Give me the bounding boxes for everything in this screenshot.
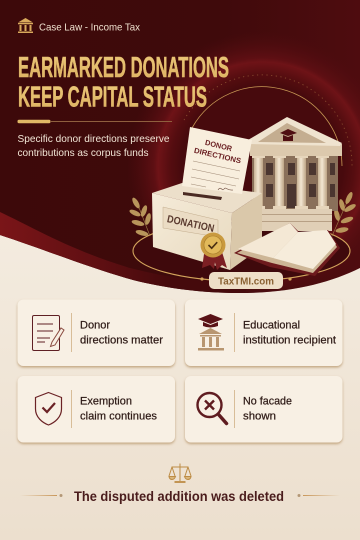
card: no facade shown [185, 376, 342, 442]
paper: donor directions: DIRECTIONS [193, 146, 242, 165]
title [18, 52, 229, 114]
decorative ring [184, 75, 352, 166]
title: KEEP CAPITAL STATUS [18, 82, 207, 114]
header: category [18, 18, 140, 34]
text: No facade [243, 396, 292, 408]
text: Exemption [80, 396, 132, 408]
hero panel [0, 0, 360, 301]
building [248, 117, 342, 231]
paper: donor directions [182, 127, 252, 194]
seal [200, 232, 227, 270]
text [80, 396, 158, 422]
text: shown [243, 410, 276, 422]
text [243, 320, 336, 346]
card: educational institution recipient [185, 300, 342, 366]
open book [234, 223, 340, 276]
paper: donor directions: DONOR [204, 138, 234, 153]
illustration [129, 117, 357, 289]
ballot box: DONATION [166, 213, 215, 235]
card: donor directions matter [18, 300, 175, 366]
icon: shield with check [36, 392, 62, 425]
laurel right [332, 191, 357, 236]
icon: document with pencil [32, 316, 64, 350]
subtitle: contributions as corpus funds [18, 148, 148, 159]
footer conclusion: The disputed addition was deleted [74, 488, 284, 504]
plinth ellipse [133, 221, 350, 281]
text [80, 320, 163, 346]
card: exemption claim continues [18, 376, 175, 442]
text: Donor [80, 320, 110, 332]
text: Educational [243, 320, 300, 332]
text: institution recipient [243, 334, 336, 346]
icon: cap and building [198, 314, 224, 350]
title rule [18, 120, 172, 123]
text [243, 396, 292, 422]
text: claim continues [80, 410, 158, 422]
category label: Case Law - Income Tax [39, 22, 140, 34]
icon: magnifier with cross [198, 393, 226, 424]
text: directions matter [80, 334, 163, 346]
ballot box [152, 127, 262, 270]
badge: TaxTMI.com: TaxTMI.com [218, 276, 274, 288]
badge: TaxTMI.com [200, 272, 292, 289]
icon: scales of justice [169, 464, 191, 482]
laurel left [129, 197, 152, 237]
subtitle: Specific donor directions preserve [18, 134, 170, 145]
subtitle [18, 134, 170, 159]
icon: bank [18, 18, 33, 33]
